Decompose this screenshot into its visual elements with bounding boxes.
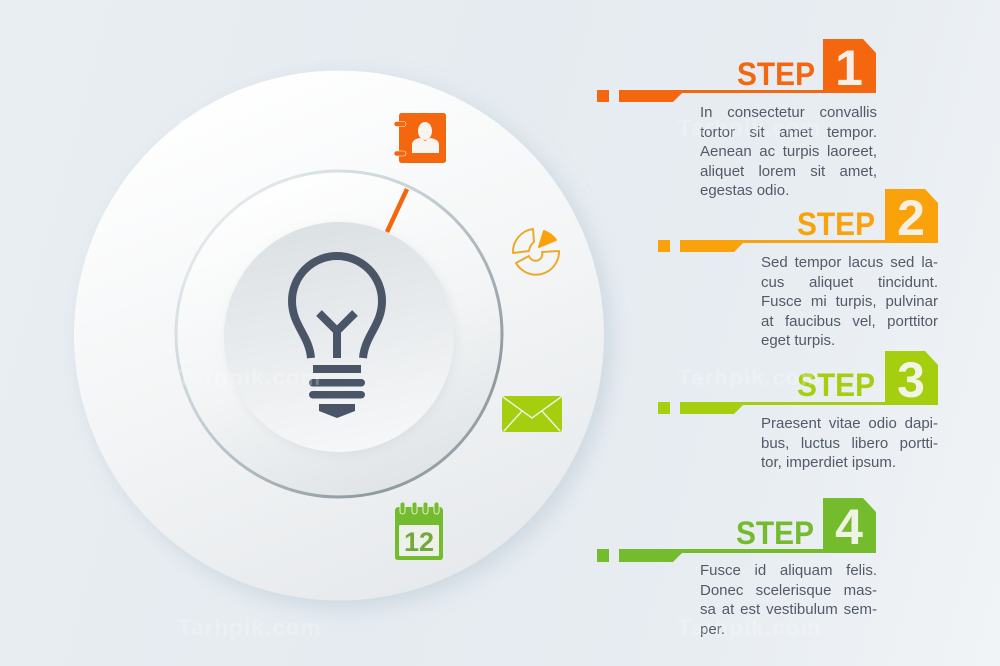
icon: calendar: 12	[404, 527, 434, 557]
panel: step 4: 4	[835, 499, 863, 555]
text block: step 2: eget turpis.	[761, 332, 835, 349]
icon: contact book	[394, 113, 446, 163]
text block: step 2: Fusce mi turpis, pulvinar	[761, 293, 938, 310]
text block: step 2	[761, 254, 938, 349]
panel: step 1: 1	[835, 40, 863, 96]
text block: step 1: Aenean ac turpis laoreet,	[700, 143, 877, 160]
watermarks: Tarhpik.com	[678, 365, 821, 390]
icon: envelope	[502, 396, 562, 432]
text block: step 2: Sed tempor lacus sed la-	[761, 254, 938, 271]
watermarks: Tarhpik.com	[178, 365, 321, 390]
text block: step 4	[700, 562, 877, 638]
icon: calendar	[395, 502, 443, 560]
text block: step 1: egestas odio.	[700, 182, 789, 199]
panel: step 3	[658, 351, 938, 471]
panel: step 3: 3	[897, 352, 925, 408]
text block: step 4: Donec scelerisque mas-	[700, 582, 877, 598]
icon: pie chart	[513, 229, 559, 275]
panel: step 2	[658, 189, 938, 349]
text block: step 3: bus, luctus libero portti-	[761, 434, 938, 452]
panel: step 1: STEP	[737, 56, 815, 92]
panel: step 2: 2	[897, 190, 925, 246]
watermarks: Tarhpik.com	[178, 615, 321, 640]
text block: step 4: per.	[700, 620, 725, 638]
outer disc	[74, 70, 604, 600]
text block: step 2: at faucibus vel, porttitor	[761, 312, 938, 330]
watermarks: Tarhpik.com	[178, 115, 321, 140]
inner disc	[224, 222, 454, 452]
icon: light bulb	[292, 256, 382, 418]
panel: step 4: STEP	[736, 515, 814, 551]
pointer line	[387, 189, 407, 232]
text block: step 1: In consectetur convallis	[700, 104, 877, 121]
text block: step 1: aliquet lorem sit amet,	[700, 162, 877, 180]
text block: step 1	[700, 104, 877, 199]
panel: step 4	[597, 498, 877, 638]
text block: step 1: tortor sit amet tempor.	[700, 124, 877, 140]
text block: step 4: sa at est vestibulum sem-	[700, 601, 877, 618]
text block: step 3: tor, imperdiet ipsum.	[761, 454, 896, 471]
panel: step 2: STEP	[797, 206, 875, 242]
text block: step 2: cus aliquet tincidunt.	[761, 274, 938, 290]
panel: step 1	[597, 39, 877, 199]
text block: step 3	[761, 415, 938, 471]
watermarks: Tarhpik.com	[678, 115, 821, 140]
panel: step 3: STEP	[797, 367, 875, 403]
middle ring disc	[176, 171, 502, 497]
watermarks: Tarhpik.com	[678, 615, 821, 640]
text block: step 4: Fusce id aliquam felis.	[700, 562, 877, 579]
text block: step 3: Praesent vitae odio dapi-	[761, 415, 938, 432]
